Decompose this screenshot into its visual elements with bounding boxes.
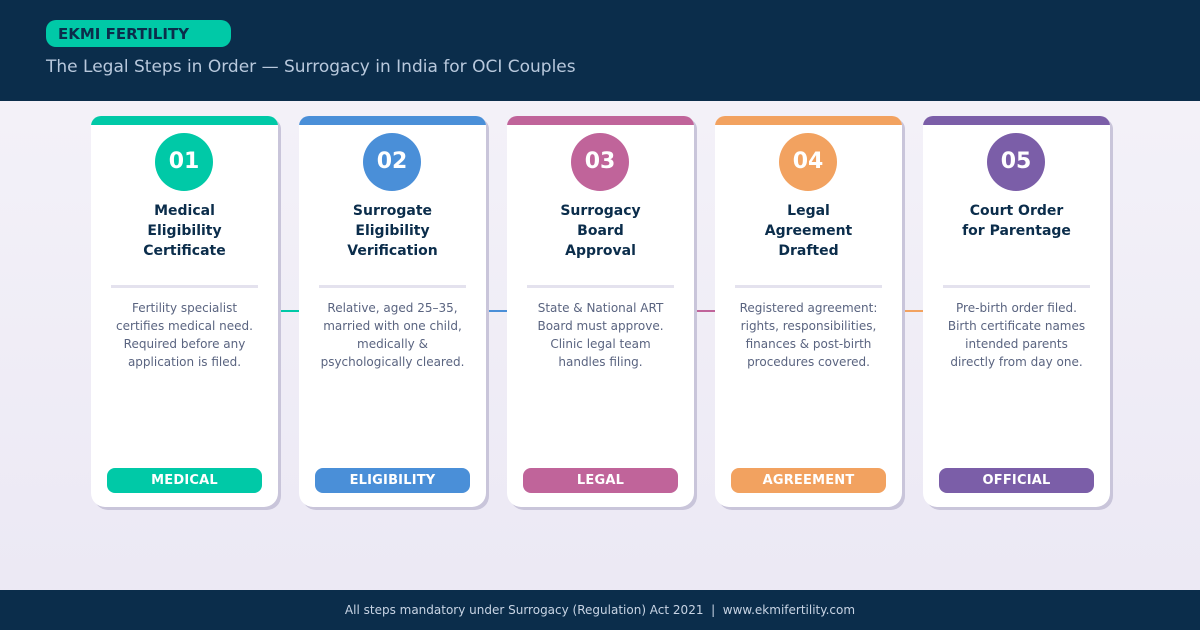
text: step 03: State & National ART xyxy=(538,301,663,315)
panel: step 05 xyxy=(923,116,1110,507)
text: step 05 xyxy=(948,301,1085,369)
text: step 01: Fertility specialist xyxy=(132,301,237,315)
heading: step 01 xyxy=(143,203,226,259)
text: step 01: certifies medical need. xyxy=(116,319,253,333)
heading: step 04 xyxy=(764,203,852,259)
text: step 03 xyxy=(537,301,664,369)
tag: legal xyxy=(523,468,678,493)
text: step 05: intended parents xyxy=(965,337,1068,351)
icon: number 05: 05 xyxy=(1001,149,1031,174)
text: step 04: procedures covered. xyxy=(747,355,870,369)
icon: number 02 xyxy=(363,133,421,191)
panel: step 02 xyxy=(299,116,486,507)
panel: step 01 xyxy=(91,116,278,507)
icon: number 05 xyxy=(987,133,1045,191)
subtitle: The Legal Steps in Order — Surrogacy in India for OCI Couples xyxy=(46,57,576,77)
text: step 02: psychologically cleared. xyxy=(321,355,464,369)
heading: step 02 xyxy=(347,203,438,259)
text: step 02: Relative, aged 25–35, xyxy=(327,301,458,315)
text: step 03: Clinic legal team xyxy=(550,337,651,351)
icon: number 01 xyxy=(155,133,213,191)
heading: step 03 xyxy=(560,203,641,259)
text: step 03: Board must approve. xyxy=(537,319,664,333)
connector 2-3 xyxy=(486,310,508,312)
heading: step 04: Drafted xyxy=(778,243,839,259)
text: step 01 xyxy=(116,301,253,369)
panel: step 03 xyxy=(507,116,694,507)
text: step 04: rights, responsibilities, xyxy=(741,319,876,333)
text: step 01: application is filed. xyxy=(128,355,241,369)
footer: All steps mandatory under Surrogacy (Regulation) Act 2021 | www.ekmifertility.com xyxy=(345,603,855,617)
icon: number 04 xyxy=(779,133,837,191)
text: step 01: Required before any xyxy=(124,337,245,351)
tag: official xyxy=(939,468,1094,493)
text: step 05: Birth certificate names xyxy=(948,319,1085,333)
connector 4-5 xyxy=(902,310,924,312)
text: step 04: Registered agreement: xyxy=(740,301,877,315)
tag: medical xyxy=(107,468,262,493)
header xyxy=(0,0,1200,101)
heading: step 02: Eligibility xyxy=(355,223,430,239)
icon: number 03 xyxy=(571,133,629,191)
tag: eligibility xyxy=(315,468,470,493)
heading: step 05: for Parentage xyxy=(962,223,1071,239)
icon: number 03: 03 xyxy=(585,149,615,174)
text: step 03: handles filing. xyxy=(558,355,643,369)
heading: step 01: Eligibility xyxy=(147,223,222,239)
heading: step 02: Surrogate xyxy=(353,203,432,219)
tag: legal: LEGAL xyxy=(577,473,624,488)
icon: number 01: 01 xyxy=(169,149,199,174)
brand pill: EKMI FERTILITY xyxy=(58,25,189,43)
tag: medical: MEDICAL xyxy=(151,473,218,488)
brand pill xyxy=(46,20,231,47)
text: step 04 xyxy=(740,301,877,369)
heading: step 04: Agreement xyxy=(765,223,852,239)
text: step 02: medically & xyxy=(357,337,428,351)
icon: number 02: 02 xyxy=(377,149,407,174)
text: step 05: Pre-birth order filed. xyxy=(956,301,1077,315)
tag: eligibility: ELIGIBILITY xyxy=(350,473,435,488)
panel: step 04 xyxy=(715,116,902,507)
heading: step 05: Court Order xyxy=(970,203,1063,219)
heading: step 05 xyxy=(962,203,1071,239)
text: step 02 xyxy=(321,301,464,369)
tag: official: OFFICIAL xyxy=(982,473,1050,488)
footer xyxy=(0,590,1200,630)
tag: agreement: AGREEMENT xyxy=(763,473,854,488)
connector 1-2 xyxy=(278,310,300,312)
heading: step 02: Verification xyxy=(347,243,438,259)
heading: step 04: Legal xyxy=(787,203,830,219)
heading: step 01: Certificate xyxy=(143,243,226,259)
text: step 05: directly from day one. xyxy=(950,355,1083,369)
icon: number 04: 04 xyxy=(793,149,823,174)
heading: step 01: Medical xyxy=(154,203,215,219)
tag: agreement xyxy=(731,468,886,493)
text: step 02: married with one child, xyxy=(323,319,462,333)
heading: step 03: Surrogacy xyxy=(560,203,641,219)
heading: step 03: Board xyxy=(577,223,624,239)
heading: step 03: Approval xyxy=(565,243,636,259)
text: step 04: finances & post-birth xyxy=(746,337,871,351)
connector 3-4 xyxy=(694,310,716,312)
